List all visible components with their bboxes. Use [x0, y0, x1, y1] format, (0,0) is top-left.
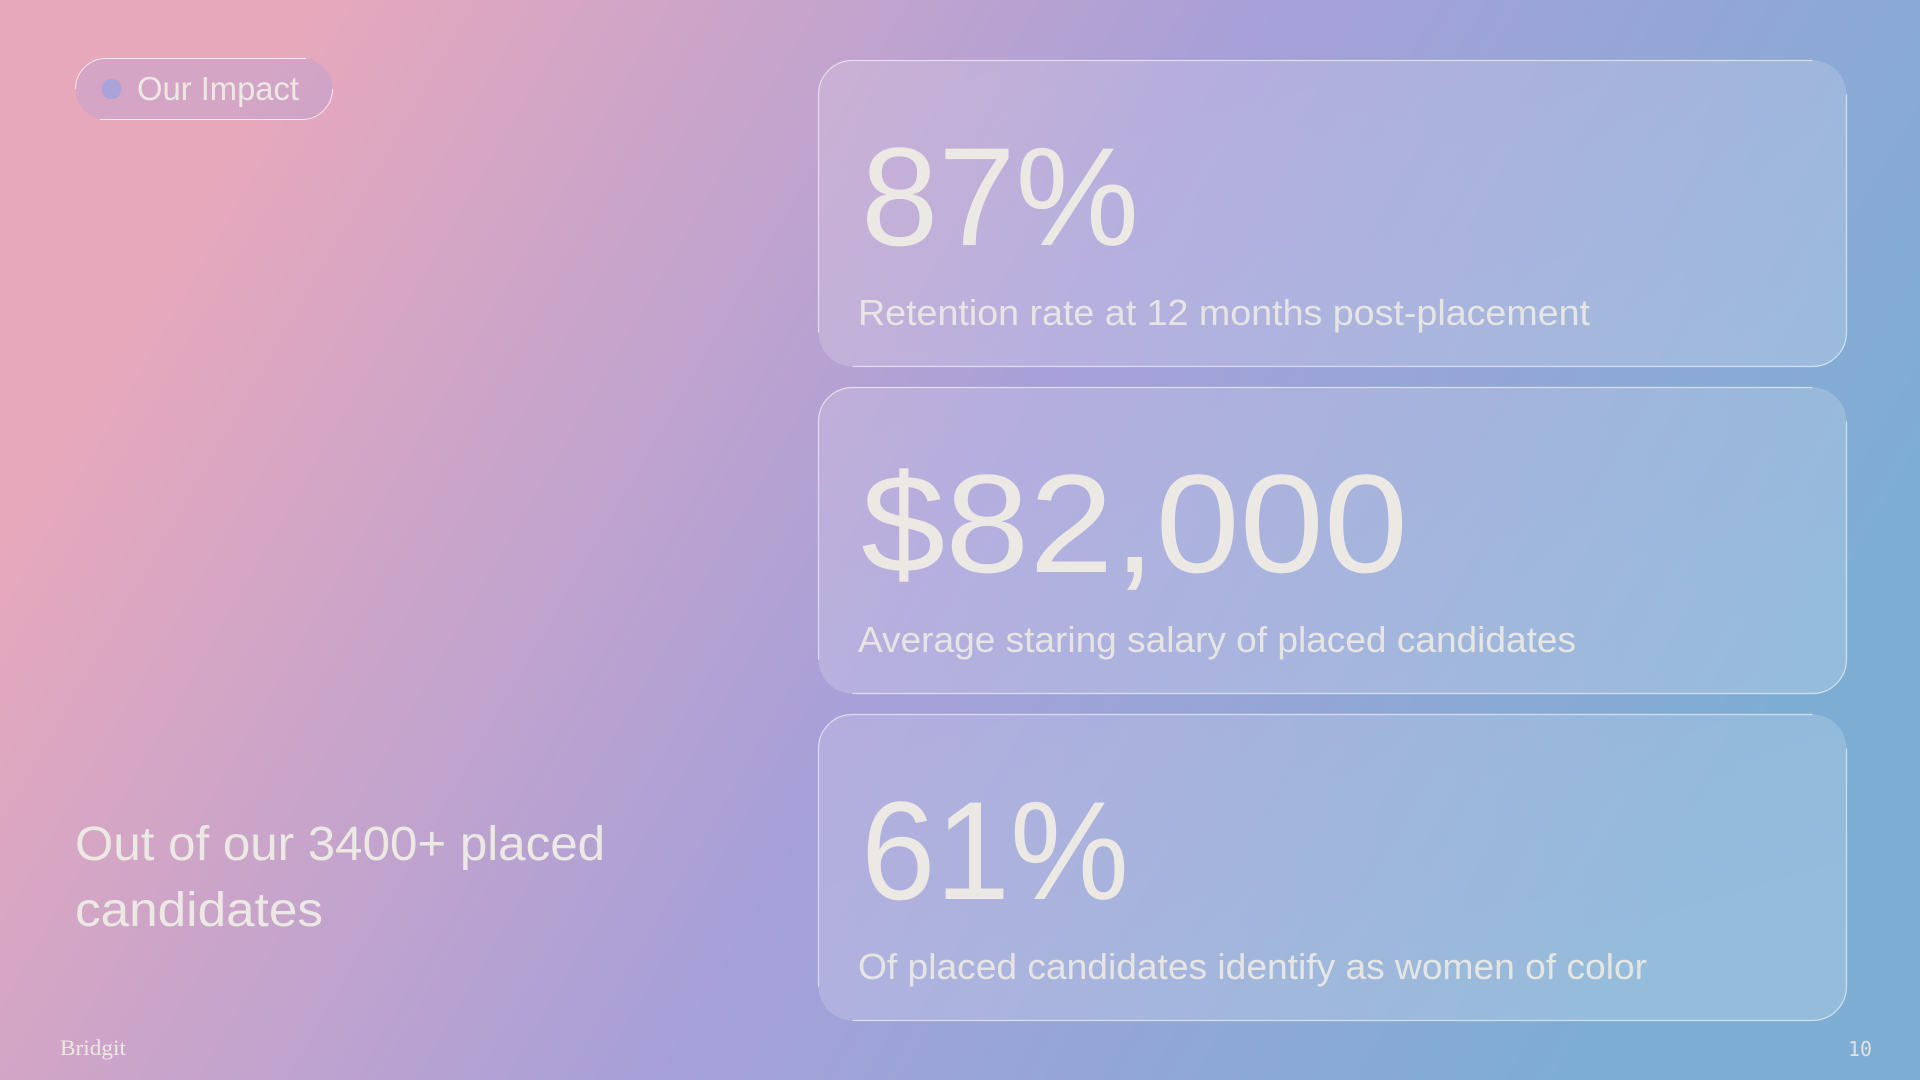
stat label: Of placed candidates identify as women of color: [858, 946, 1647, 987]
subheading: Out of our 3400+ placed: [75, 818, 605, 871]
pill label: Our Impact: [137, 70, 299, 107]
subheading: [75, 818, 605, 937]
panel: salary stat: [818, 388, 1846, 694]
icon: dot: [102, 79, 122, 99]
stat value: 87%: [861, 118, 1139, 275]
panel: retention stat: [818, 60, 1846, 366]
stat value: 61%: [861, 772, 1129, 929]
stat value: $82,000: [861, 445, 1408, 602]
stat label: Average staring salary of placed candidates: [858, 619, 1576, 660]
page number: 10: [1848, 1037, 1872, 1061]
footer brand: Bridgit: [60, 1035, 126, 1060]
subheading: candidates: [75, 884, 323, 937]
panel: women of color stat: [818, 714, 1846, 1020]
stat label: Retention rate at 12 months post-placement: [858, 292, 1590, 333]
pill: section tag: [76, 58, 332, 120]
